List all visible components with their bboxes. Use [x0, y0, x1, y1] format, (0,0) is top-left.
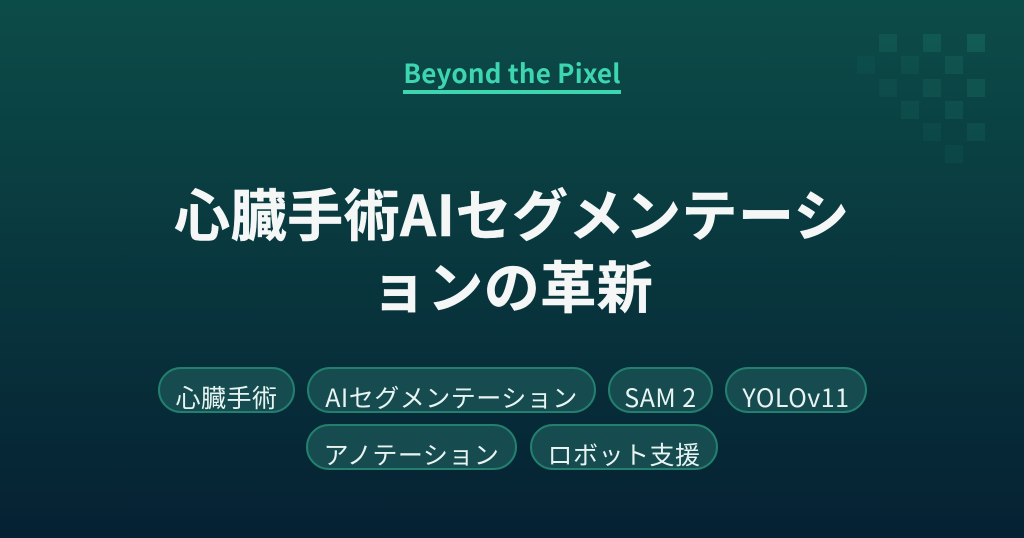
tag: 心臓手術	[158, 367, 295, 413]
decorative square pattern	[879, 34, 985, 141]
tag: YOLOv11: YOLOv11	[742, 379, 850, 415]
tag: アノテーション: アノテーション	[324, 436, 499, 472]
tag: 心臓手術: 心臓手術	[175, 379, 278, 415]
tag: SAM 2: SAM 2	[624, 379, 697, 415]
tag: SAM 2	[608, 367, 713, 413]
tag: ロボット支援: ロボット支援	[547, 436, 700, 472]
tag: AIセグメンテーション	[307, 367, 596, 413]
title: ョンの革新	[371, 244, 653, 325]
tag: ロボット支援	[530, 424, 718, 470]
tag: AIセグメンテーション: AIセグメンテーション	[325, 379, 578, 415]
tag: YOLOv11	[725, 367, 867, 413]
tag: アノテーション	[306, 424, 517, 470]
title	[174, 172, 850, 325]
brand label: Beyond the Pixel	[403, 54, 621, 91]
title: 心臓手術AIセグメンテーシ	[174, 172, 850, 253]
